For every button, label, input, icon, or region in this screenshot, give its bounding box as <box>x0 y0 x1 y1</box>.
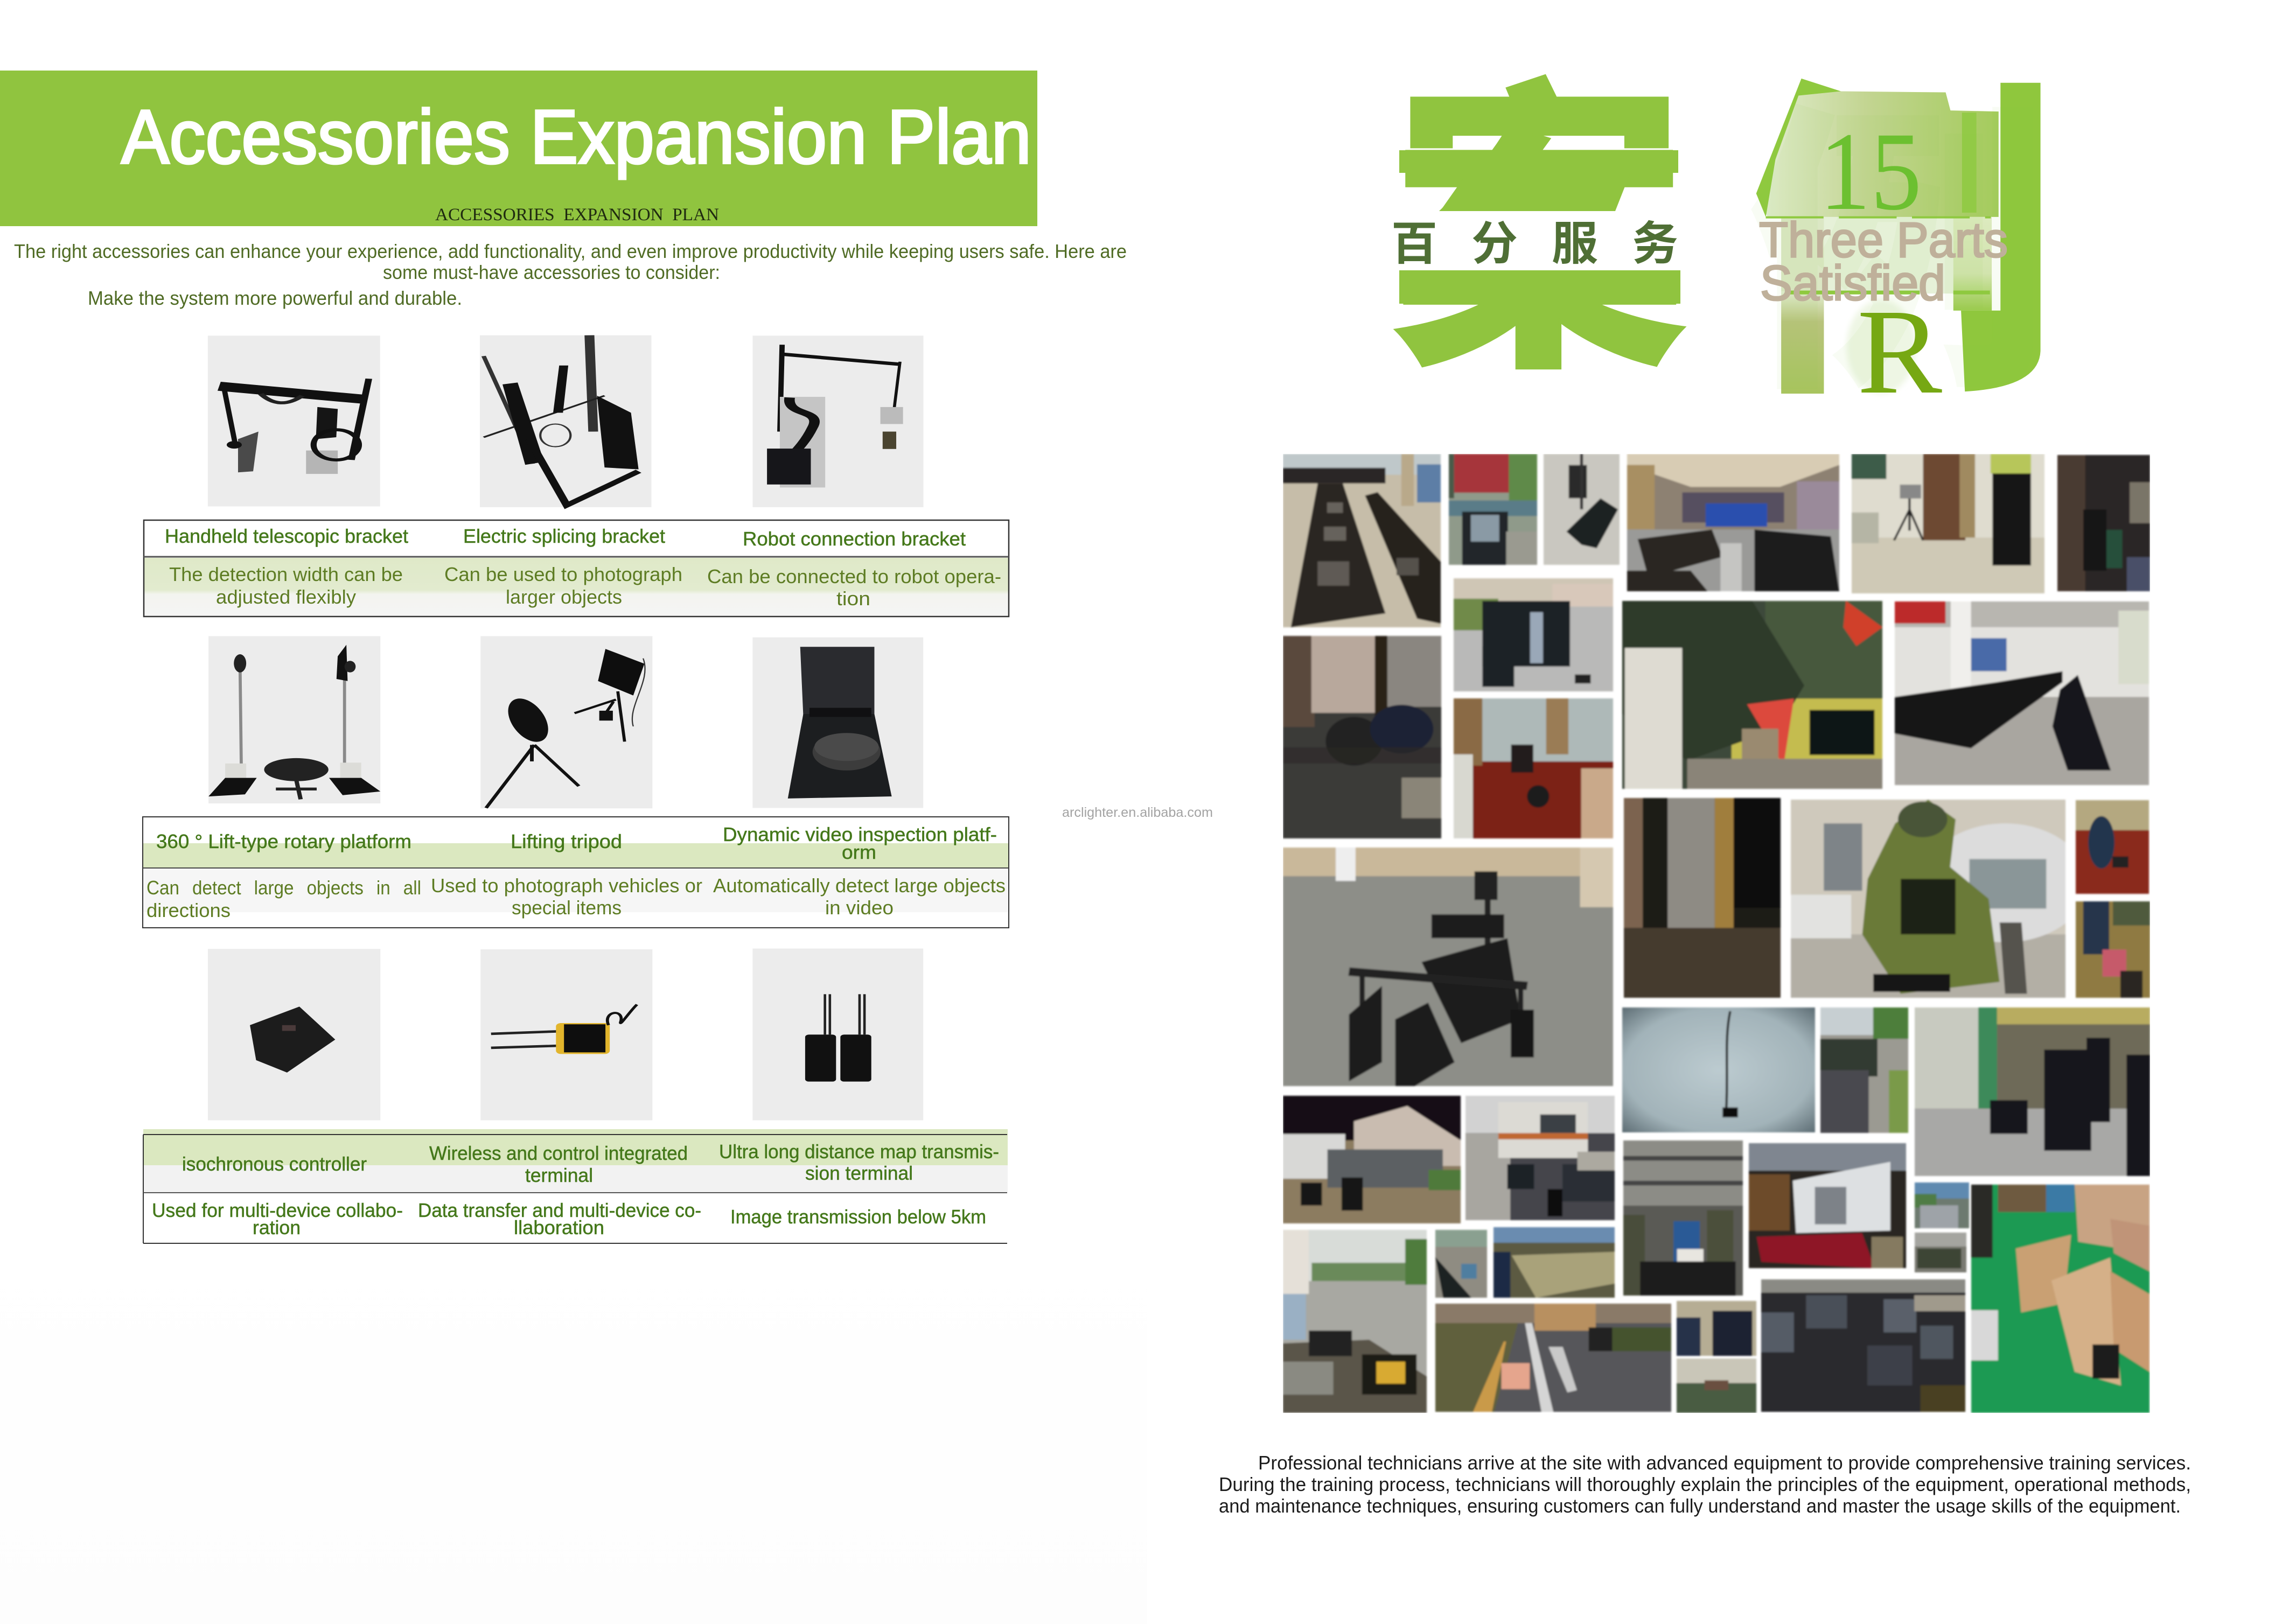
row 3 descriptions: ration <box>253 1216 301 1238</box>
photo: road with truck <box>1435 1304 1671 1412</box>
photo: equipment along road <box>1819 1006 1910 1134</box>
photo: robot on floor <box>1543 454 1620 566</box>
training description paragraph <box>1219 1452 2191 1517</box>
intro text: some must-have accessories to consider: <box>383 261 720 283</box>
image: wireless and control integrated terminal <box>480 949 652 1121</box>
row 3 names: terminal <box>525 1164 593 1186</box>
row 2 names: Lifting tripod <box>511 830 622 852</box>
row 1 descriptions: adjusted flexibly <box>216 586 356 608</box>
photo: burned electrical scene <box>1283 634 1443 840</box>
row 3 descriptions <box>152 1199 986 1238</box>
table 1 <box>144 520 1009 617</box>
image: lifting tripod <box>480 636 652 808</box>
photo collage <box>1283 454 2150 1413</box>
training description paragraph: Professional technicians arrive at the site with advanced equipment to provide comprehensive training services. <box>1258 1452 2191 1474</box>
intro text <box>14 240 1127 309</box>
photo: pickup truck at night <box>1283 1096 1461 1223</box>
subtitle: ACCESSORIES EXPANSION PLAN <box>435 205 719 225</box>
label: 百分服务: 百分服务 <box>1391 206 1712 273</box>
row 3 descriptions: Used for multi-device collabo- <box>152 1199 403 1221</box>
photo: rows of equipment cases <box>1283 454 1442 629</box>
watermark: arclighter.en.alibaba.com <box>1062 805 1213 820</box>
row 3 names <box>182 1140 999 1186</box>
row 1 descriptions: tion <box>836 587 870 610</box>
photo: red wood floor room <box>1452 697 1615 840</box>
photo: rubble scene <box>1494 1227 1615 1298</box>
row 3 names: sion terminal <box>805 1162 913 1184</box>
image: dynamic video inspection platform <box>752 638 923 808</box>
training description paragraph: and maintenance techniques, ensuring customers can fully understand and master the usage skills of the equipment. <box>1219 1495 2181 1517</box>
product images row 1 <box>208 335 923 509</box>
table 2 <box>143 817 1009 928</box>
photo: equipment table small <box>1435 1230 1487 1298</box>
photo: outdoor group small <box>1915 1182 1969 1228</box>
row 1 descriptions: Can be connected to robot opera- <box>707 565 1001 587</box>
photo: conference room <box>1625 454 1841 593</box>
photo: officers outdoors <box>1452 577 1614 692</box>
heading character: 例 with overlay text: 例 <box>1748 11 2049 448</box>
photo: group under canopy small <box>1915 1233 1966 1272</box>
row 2 names: orm <box>842 841 876 863</box>
photo: officers with equipment by wall <box>1914 1006 2150 1178</box>
row 3 names: Ultra long distance map transmis- <box>719 1140 999 1163</box>
photo: many open cases <box>1761 1279 1965 1412</box>
photo: hall with audience <box>1677 1359 1756 1413</box>
text: Satisfied: Satisfied <box>1760 256 1945 311</box>
row 1 descriptions: Can be used to photograph <box>444 563 682 585</box>
image: electric splicing bracket <box>480 335 651 507</box>
row 3 names: Wireless and control integrated <box>429 1142 688 1164</box>
backing texture <box>1756 79 2041 395</box>
row 2 descriptions: Can detect large objects in all <box>146 877 421 899</box>
product images rows 2 and 3 <box>208 636 923 1120</box>
row 2 descriptions: in video <box>825 897 894 919</box>
row 1 names: Electric splicing bracket <box>463 525 665 547</box>
row 2 descriptions: Automatically detect large objects <box>713 874 1006 897</box>
row 3 descriptions: Image transmission below 5km <box>730 1206 986 1228</box>
row 1 descriptions: larger objects <box>506 586 622 608</box>
photo: vignette inspection image <box>1621 1006 1816 1134</box>
image: robot connection bracket <box>752 335 924 507</box>
row 2 names: Dynamic video inspection platf- <box>723 823 997 845</box>
row 3 names: isochronous controller <box>182 1153 367 1175</box>
image: ultra long distance map transmission terminal <box>752 948 923 1121</box>
row 3 descriptions: Data transfer and multi-device co- <box>418 1199 701 1221</box>
photo: theatre training screen <box>1749 1143 1906 1268</box>
row 1 descriptions <box>169 563 1001 610</box>
row 2 names: 360 ° Lift-type rotary platform <box>156 830 411 852</box>
photo: kneeling worker on red floor <box>2074 799 2150 895</box>
photo: boxes on green floor <box>1971 1185 2150 1413</box>
row 1 descriptions: The detection width can be <box>169 563 403 585</box>
letter R: R <box>1857 284 1942 419</box>
photo: ambulance and equipment <box>1466 1096 1615 1220</box>
photo: bomb suit and detector <box>1621 599 1884 790</box>
row 2 descriptions <box>146 874 1006 921</box>
row 3 descriptions: llaboration <box>514 1216 604 1238</box>
row 1 names <box>165 525 966 550</box>
row 2 descriptions: Used to photograph vehicles or <box>431 874 702 897</box>
intro text: The right accessories can enhance your experience, add functionality, and even improve productivity while keeping users safe. Here are <box>14 240 1127 262</box>
photo: damaged dark interior <box>1622 796 1782 999</box>
intro text: Make the system more powerful and durable. <box>88 287 462 309</box>
row 1 names: Handheld telescopic bracket <box>165 525 408 547</box>
photo: field gear and road <box>1283 1230 1427 1413</box>
photo: exhibition case and banner <box>1448 454 1538 566</box>
row 2 descriptions: directions <box>146 899 231 921</box>
number 15: 15 <box>1819 109 1922 233</box>
table 3 <box>143 1129 1008 1243</box>
photo: robot with bracket in warehouse <box>1283 846 1615 1088</box>
row 2 descriptions: special items <box>512 897 622 919</box>
training description paragraph: During the training process, technicians will thoroughly explain the principles of the equipment, operational methods, <box>1219 1473 2191 1495</box>
photo: officers group <box>1677 1301 1756 1356</box>
photo: soldiers under canopy <box>1623 1140 1743 1296</box>
photo: tripod inspection indoors <box>1850 454 2046 594</box>
text: Three Parts: Three Parts <box>1759 213 2008 268</box>
title banner <box>0 71 1037 226</box>
image: 360 lift-type rotary platform <box>208 636 380 803</box>
photo: cases lined in hall <box>1893 600 2150 786</box>
row 2 names <box>156 823 997 863</box>
photo: worker with pink crate <box>2075 900 2150 999</box>
image: isochronous controller <box>208 949 380 1121</box>
row 1 names: Robot connection bracket <box>743 528 966 550</box>
photo: bomb disposal technician <box>1790 799 2067 999</box>
image: handheld telescopic bracket <box>208 335 380 506</box>
photo: dark cabinet interior <box>2056 454 2150 593</box>
title: Accessories Expansion Plan <box>121 94 1031 180</box>
